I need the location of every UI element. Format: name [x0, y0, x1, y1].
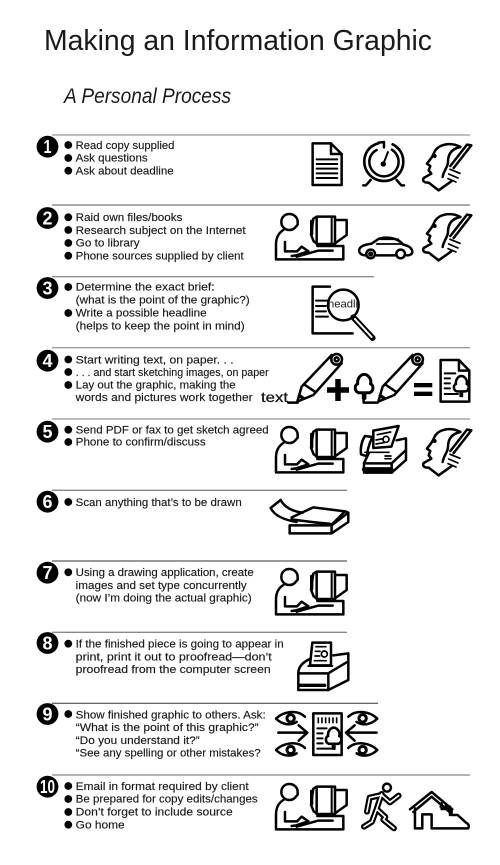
icon: scanner [271, 500, 348, 533]
icon: finished page [441, 360, 469, 402]
step 2 text: Raid own files/books [76, 212, 183, 224]
icon: head with phone [423, 144, 471, 190]
icon: person at computer [276, 214, 347, 259]
icon: head with phone [423, 214, 471, 260]
step 8 text: print, print it out to proofread—don’t [76, 651, 272, 663]
icon: magnifier over headline [313, 287, 373, 338]
step 7 text [64, 567, 254, 605]
step 7 text: Using a drawing application, create [76, 567, 254, 579]
icon: person at computer [276, 569, 347, 614]
icon: person at computer [276, 784, 347, 829]
step 2 [37, 205, 471, 262]
icon: text written with pen: text [261, 389, 288, 405]
icon: eyes and arrows reviewing graphic [276, 712, 377, 756]
step 10 text: Email in format required by client [76, 781, 249, 793]
icon: document [313, 143, 342, 185]
step 6 number badge [37, 491, 58, 513]
step 1 text: Ask questions [76, 153, 148, 165]
step 8 text: proofread from the computer screen [76, 664, 271, 676]
step 9 text: “What is the point of this graphic?” [76, 722, 259, 734]
step 9 number badge: 9 [42, 704, 52, 724]
step 3 number badge [37, 277, 58, 299]
step 10 text: Be prepared for copy edits/changes [76, 794, 258, 806]
step 6 [37, 490, 348, 533]
step 5 text: Send PDF or fax to get sketch agreed [76, 424, 269, 436]
step 5 number badge [37, 421, 58, 443]
step 7 number badge [37, 562, 58, 584]
step 1 text [64, 140, 174, 177]
step 3 number badge: 3 [42, 278, 52, 298]
icon: magnifier over headline: headli [328, 298, 358, 310]
icon: running figure [364, 784, 399, 828]
icon: equals [414, 383, 432, 396]
step 2 number badge [37, 207, 58, 229]
step 10 text: Don’t forget to include source [76, 807, 233, 819]
icon: person at computer [276, 427, 347, 472]
step 1 number badge [37, 136, 58, 158]
step 4 text: words and pictures work together [75, 392, 253, 404]
step 9 text: “Do you understand it?” [76, 735, 200, 747]
step 1 text: Read copy supplied [76, 140, 174, 152]
step 3 [37, 277, 374, 338]
step 2 text: Phone sources supplied by client [76, 250, 244, 262]
step 5 number badge: 5 [42, 422, 52, 442]
step 9 text: Show finished graphic to others. Ask: [76, 709, 266, 721]
step 9 text: “See any spelling or other mistakes? [76, 748, 261, 760]
step 4 number badge [37, 350, 58, 372]
step 4 [37, 348, 470, 405]
step 7 number badge: 7 [42, 563, 52, 583]
step 5 [37, 419, 471, 475]
icon: car [359, 238, 412, 258]
step 2 text: Research subject on the Internet [76, 225, 246, 237]
step 4 text [64, 354, 269, 404]
step 8 [37, 632, 348, 690]
step 1 [37, 135, 471, 190]
title: Making an Information Graphic [44, 25, 432, 57]
step 7 text: (now I’m doing the actual graphic) [76, 593, 252, 605]
step 7 text: images and set type concurrently [76, 580, 247, 592]
step 2 text: Go to library [76, 238, 140, 250]
step 5 text: Phone to confirm/discuss [76, 437, 206, 449]
step 1 text: Ask about deadline [76, 165, 174, 177]
step 1 number badge: 1 [44, 137, 52, 157]
step 9 number badge [37, 703, 58, 725]
step 9 [37, 703, 378, 760]
step 8 number badge [37, 632, 58, 654]
step 3 text: Determine the exact brief: [76, 282, 215, 294]
step 8 number badge: 8 [42, 633, 52, 653]
step 3 text: (helps to keep the point in mind) [76, 320, 245, 332]
icon: head with phone [423, 429, 471, 475]
step 10 text: Go home [76, 819, 125, 831]
step 7 [37, 561, 347, 614]
step 8 text [64, 639, 284, 676]
step 10 [37, 775, 470, 831]
icon: tree drawn with pen [355, 354, 423, 403]
step 4 text: . . . and start sketching images, on paper [76, 367, 269, 379]
icon: alarm clock [363, 142, 404, 185]
icon: printer [298, 643, 348, 690]
step 3 text: (what is the point of the graphic?) [76, 294, 250, 306]
step 4 text: Lay out the graphic, making the [76, 379, 236, 391]
step 8 text: If the finished piece is going to appear in [76, 639, 284, 651]
step 10 number badge: 10 [40, 777, 55, 797]
step 9 text [64, 709, 266, 760]
step 6 number badge: 6 [42, 492, 52, 512]
step 3 text [64, 282, 250, 332]
icon: house [410, 792, 469, 828]
step 2 number badge: 2 [42, 208, 52, 228]
step 2 text [64, 212, 246, 262]
step 6 text: Scan anything that’s to be drawn [76, 497, 242, 509]
subtitle: A Personal Process [62, 85, 231, 108]
step 10 text [64, 781, 258, 831]
step 4 number badge: 4 [42, 351, 52, 371]
icon: text written with pen [261, 354, 342, 405]
step 3 text: Write a possible headline [76, 308, 207, 320]
step 5 text [64, 424, 269, 449]
step 4 text: Start writing text, on paper. . . [76, 354, 234, 366]
icon: plus [327, 379, 349, 401]
icon: fax machine [361, 426, 406, 473]
